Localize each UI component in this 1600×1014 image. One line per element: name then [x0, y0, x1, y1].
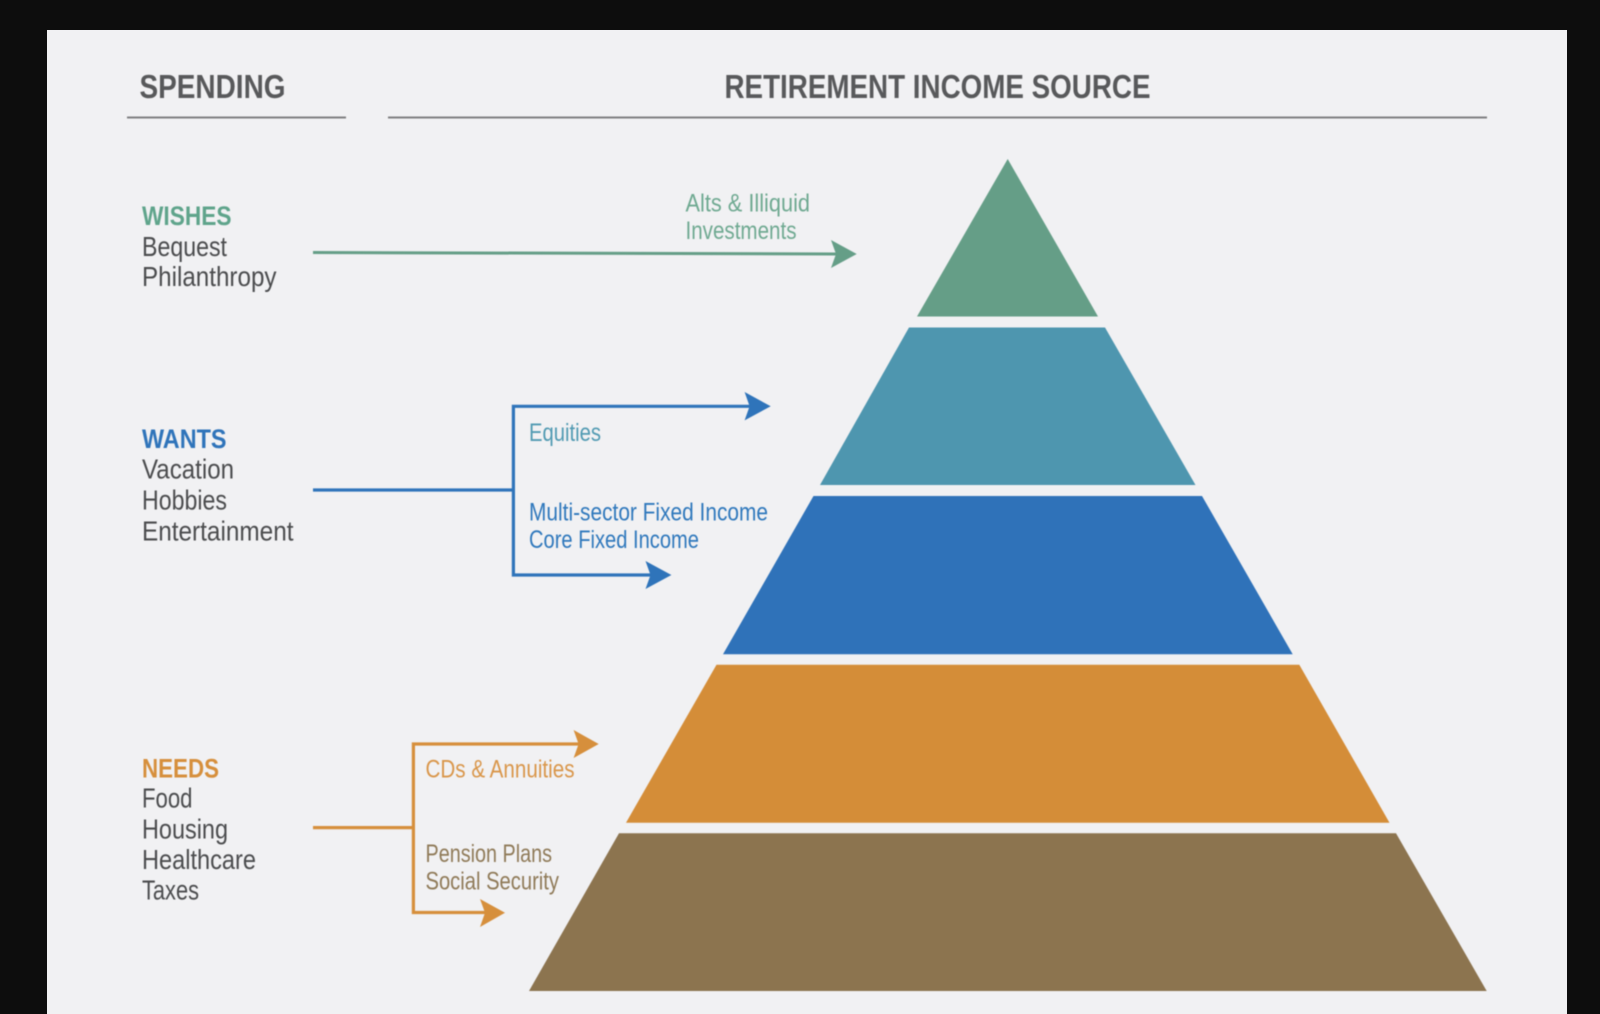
tier: pension and social security — [529, 833, 1487, 991]
label: fixed income: Core Fixed Income — [529, 526, 699, 554]
text block: needs: Food — [142, 782, 192, 814]
label: fixed income — [529, 498, 768, 554]
text block: wishes — [142, 201, 276, 292]
label: alts and illiquid investments: Investments — [686, 217, 796, 245]
tier: cds and annuities — [626, 665, 1390, 823]
label: alts and illiquid investments: Alts & Illiquid — [686, 190, 810, 218]
text block: wants: WANTS — [142, 424, 226, 454]
text block: wants: Vacation — [142, 454, 234, 484]
label: equities: Equities — [529, 419, 601, 447]
tier: equities — [820, 328, 1196, 485]
text block: needs — [142, 754, 256, 906]
text block: wishes: Bequest — [142, 231, 227, 262]
text block: wants: Entertainment — [142, 516, 294, 546]
label: pension and social security: Social Security — [426, 868, 559, 896]
arrow: wants bracket — [313, 392, 771, 589]
label: cds and annuities: CDs & Annuities — [426, 756, 574, 784]
text block: wishes: WISHES — [142, 201, 232, 231]
chart: income pyramid — [529, 159, 1487, 991]
text block: needs: Healthcare — [142, 844, 256, 875]
label: pension and social security — [426, 840, 559, 896]
text block: needs: Taxes — [142, 874, 199, 906]
tier: fixed income — [723, 496, 1293, 654]
label: pension and social security: Pension Plans — [426, 840, 552, 868]
label: fixed income: Multi-sector Fixed Income — [529, 498, 768, 526]
text block: needs: NEEDS — [142, 754, 219, 784]
text block: wishes: Philanthropy — [142, 261, 276, 292]
tier: alts and illiquid — [917, 159, 1098, 316]
text block: needs: Housing — [142, 814, 228, 844]
text block: wants — [142, 424, 294, 546]
label: alts and illiquid investments — [686, 190, 810, 245]
heading: retirement income source: RETIREMENT INCOME SOURCE — [724, 68, 1150, 105]
text block: wants: Hobbies — [142, 484, 227, 516]
heading: spending: SPENDING — [140, 68, 286, 105]
arrow: wishes to alts — [313, 240, 857, 268]
arrow: needs bracket — [313, 730, 599, 927]
